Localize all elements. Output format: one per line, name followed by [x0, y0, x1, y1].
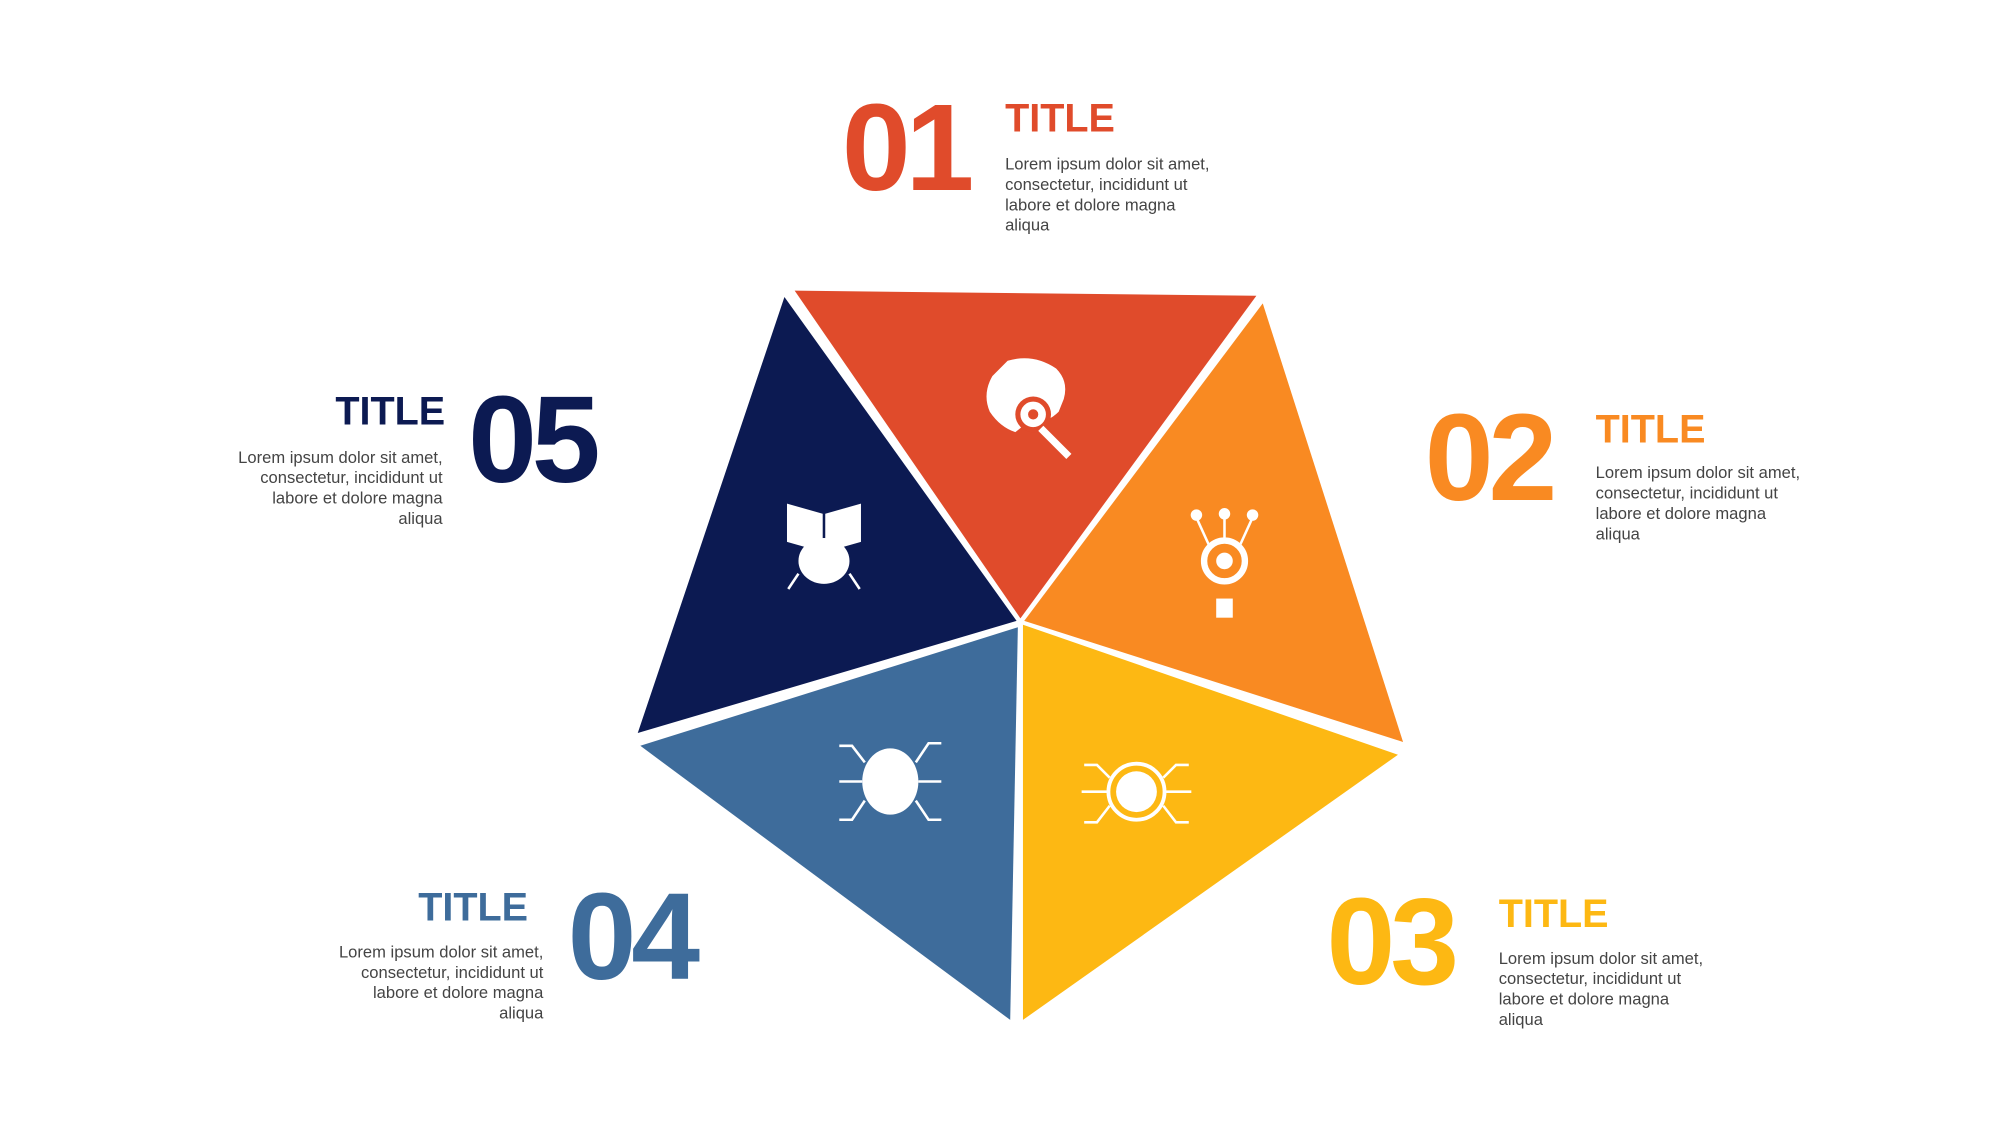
- block 05: labore et dolore magna: [272, 489, 443, 508]
- block 03: aliqua: [1499, 1010, 1544, 1029]
- block 01: [842, 79, 1210, 235]
- block 05: 05: [468, 371, 598, 509]
- block 04: aliqua: [499, 1004, 544, 1023]
- block 03: 03: [1327, 873, 1455, 1011]
- block 03: Lorem ipsum dolor sit amet,: [1499, 949, 1703, 968]
- block 02: consectetur, incididunt ut: [1596, 483, 1778, 502]
- block 01: TITLE: [1005, 96, 1115, 140]
- block 04: consectetur, incididunt ut: [361, 963, 544, 982]
- block 02: Lorem ipsum dolor sit amet,: [1596, 463, 1800, 482]
- block 01: labore et dolore magna: [1005, 195, 1176, 214]
- block 02: TITLE: [1596, 407, 1705, 451]
- block 01: consectetur, incididunt ut: [1005, 175, 1188, 194]
- block 04: 04: [568, 868, 700, 1006]
- block 05: Lorem ipsum dolor sit amet,: [238, 448, 443, 467]
- block 04: TITLE: [418, 885, 528, 929]
- block 02: labore et dolore magna: [1596, 504, 1767, 523]
- icon: brain circuit: [839, 743, 941, 820]
- segment 2 orange: [1024, 303, 1403, 742]
- block 02: [1425, 389, 1800, 543]
- block 03: labore et dolore magna: [1499, 990, 1670, 1009]
- block 04: [339, 868, 700, 1023]
- icon: book brain: [787, 504, 861, 589]
- icon: idea gear: [1191, 509, 1258, 617]
- block 02: aliqua: [1596, 524, 1641, 543]
- block 05: TITLE: [335, 390, 445, 434]
- block 04: Lorem ipsum dolor sit amet,: [339, 942, 543, 961]
- segment 5 navy: [638, 297, 1017, 733]
- block 03: consectetur, incididunt ut: [1499, 969, 1681, 988]
- block 05: aliqua: [398, 509, 443, 528]
- block 03: [1327, 873, 1703, 1029]
- segment 4 blue: [640, 627, 1018, 1020]
- block 03: TITLE: [1499, 892, 1609, 936]
- segment 3 yellow: [1023, 625, 1398, 1020]
- icon: brain search: [987, 358, 1071, 459]
- block 04: labore et dolore magna: [373, 983, 544, 1002]
- segment 1 red: [795, 291, 1256, 618]
- icon: brain network: [1082, 764, 1191, 822]
- block 01: 01: [842, 79, 972, 217]
- block 01: Lorem ipsum dolor sit amet,: [1005, 155, 1210, 174]
- block 05: consectetur, incididunt ut: [260, 468, 443, 487]
- block 02: 02: [1425, 389, 1552, 527]
- block 05: [238, 371, 598, 528]
- block 01: aliqua: [1005, 216, 1050, 235]
